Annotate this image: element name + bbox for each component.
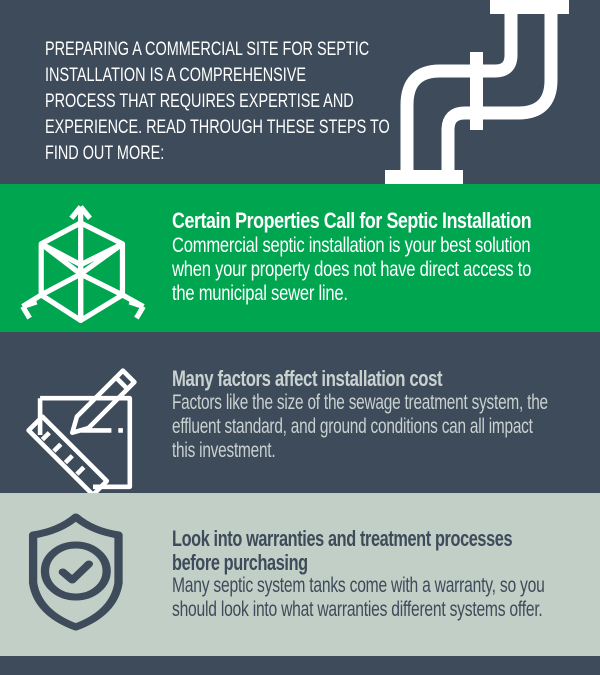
body text — [172, 391, 548, 462]
heading: Look into warranties and treatment processes — [172, 526, 512, 551]
icon: pipe — [385, 0, 569, 184]
body text: should look into what warranties different systems offer. — [172, 598, 543, 621]
icon: shield — [28, 514, 123, 630]
intro text — [45, 39, 390, 164]
intro text: FIND OUT MORE: — [45, 143, 164, 164]
heading: before purchasing — [172, 550, 308, 575]
heading: Many factors affect installation cost — [172, 366, 442, 391]
heading — [172, 526, 512, 575]
intro text: EXPERIENCE. READ THROUGH THESE STEPS TO — [45, 117, 390, 138]
intro text: INSTALLATION IS A COMPREHENSIVE — [45, 65, 306, 86]
intro text: PROCESS THAT REQUIRES EXPERTISE AND — [45, 91, 354, 112]
body text: when your property does not have direct access to — [172, 258, 531, 281]
body text: the municipal sewer line. — [172, 282, 348, 305]
body text: this investment. — [172, 439, 275, 462]
panel: cost — [0, 332, 600, 493]
body text — [172, 574, 545, 621]
panel: warranties — [0, 493, 600, 656]
body text: effluent standard, and ground conditions can all impact — [172, 415, 533, 438]
icon: cube — [20, 205, 146, 324]
heading: Certain Properties Call for Septic Installation — [172, 208, 531, 233]
body text: Many septic system tanks come with a warranty, so you — [172, 574, 545, 597]
intro text: PREPARING A COMMERCIAL SITE FOR SEPTIC — [45, 39, 369, 60]
body text: Commercial septic installation is your best solution — [172, 234, 530, 257]
body text: Factors like the size of the sewage treatment system, the — [172, 391, 548, 414]
body text — [172, 234, 531, 305]
icon: pencil ruler — [26, 368, 137, 493]
panel: properties — [0, 184, 600, 332]
